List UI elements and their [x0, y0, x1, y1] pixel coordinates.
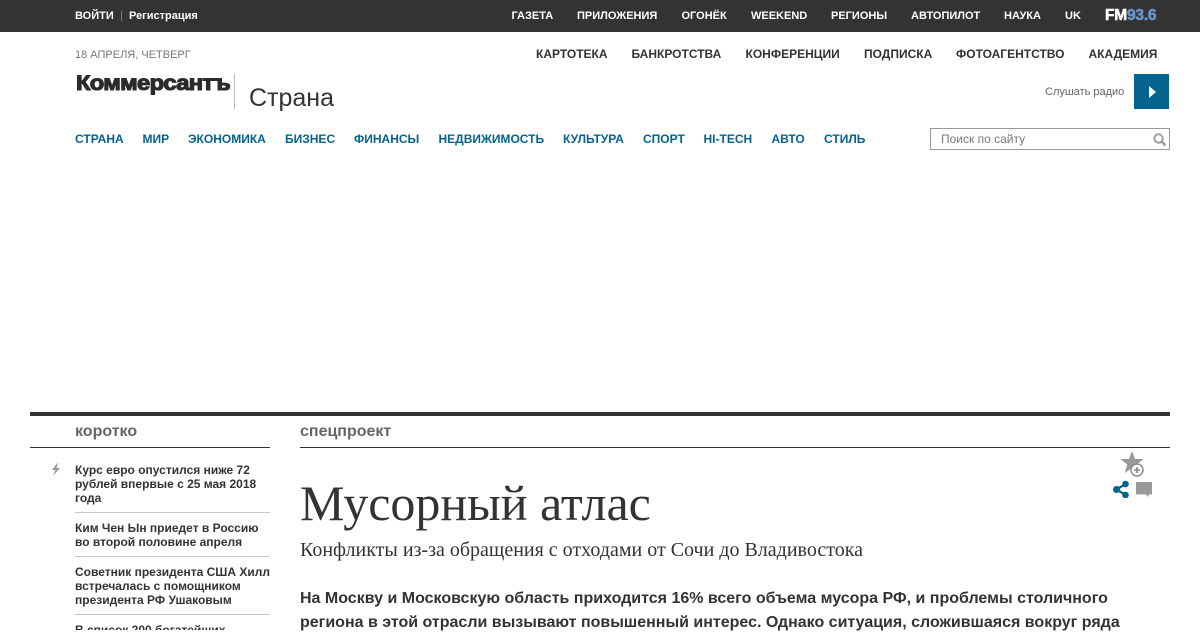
news item 1: года	[75, 491, 101, 505]
link: uk: UK	[1065, 10, 1081, 22]
logo: Kommersant: Коммерсантъ	[76, 72, 229, 94]
link: gazeta: ГАЗЕТА	[512, 10, 553, 22]
menu: business: БИЗНЕС	[285, 132, 335, 146]
article lead	[300, 590, 1120, 631]
icon: share	[1113, 480, 1129, 498]
article lead: На Москву и Московскую область приходится 16% всего объема мусора РФ, и проблемы столичного	[300, 590, 1108, 607]
section title: Страна	[249, 84, 334, 112]
main navigation	[75, 132, 865, 146]
menu: style: СТИЛЬ	[824, 132, 865, 146]
sidebar heading rule	[30, 447, 270, 448]
date: 18 АПРЕЛЯ, ЧЕТВЕРГ	[75, 49, 191, 61]
secondary navigation	[536, 47, 1157, 61]
article title: Мусорный атлас	[300, 475, 651, 531]
icon: comment	[1136, 482, 1152, 497]
search placeholder: Поиск по сайту	[941, 132, 1025, 146]
menu: auto: АВТО	[772, 132, 805, 146]
link: ogonek: ОГОНЁК	[682, 10, 727, 22]
search box	[930, 128, 1170, 150]
section rule	[300, 447, 1170, 448]
news item 3: Советник президента США Хилл	[75, 565, 270, 579]
link: photo agency: ФОТОАГЕНТСТВО	[956, 47, 1065, 61]
link: regions: РЕГИОНЫ	[831, 10, 887, 22]
link: weekend: WEEKEND	[751, 10, 807, 22]
login link: ВОЙТИ	[75, 10, 114, 22]
menu: economy: ЭКОНОМИКА	[188, 132, 266, 146]
news item 3: президента РФ Ушаковым	[75, 593, 232, 607]
news item 3: встречалась с помощником	[75, 579, 241, 593]
news item 1: Курс евро опустился ниже 72	[75, 463, 250, 477]
menu: hi-tech: HI-TECH	[704, 132, 752, 146]
section label: спецпроект	[300, 423, 391, 440]
article lead: региона в этой отрасли вызывают повышенный интерес. Однако ситуация, сложившаяся вокруг ряда	[300, 614, 1120, 631]
menu: sport: СПОРТ	[643, 132, 685, 146]
link: bankruptcy: БАНКРОТСТВА	[632, 47, 721, 61]
radio play button	[1134, 74, 1169, 109]
news item 2	[75, 521, 258, 549]
link: conferences: КОНФЕРЕНЦИИ	[746, 47, 840, 61]
thick divider	[30, 412, 1170, 416]
sidebar heading: коротко	[75, 423, 137, 440]
icon: lightning	[52, 462, 60, 476]
logo divider	[234, 74, 235, 109]
news item 3	[75, 565, 270, 607]
link: science: НАУКА	[1004, 10, 1041, 22]
menu: culture: КУЛЬТУРА	[563, 132, 624, 146]
link: academy: АКАДЕМИЯ	[1088, 47, 1157, 61]
news item 1	[75, 463, 256, 505]
menu: strana: СТРАНА	[75, 132, 124, 146]
menu: mir: МИР	[142, 132, 169, 146]
article subtitle: Конфликты из-за обращения с отходами от Сочи до Владивостока	[300, 539, 863, 561]
sidebar: short news	[30, 423, 270, 630]
icon: magnifier	[1153, 133, 1166, 146]
radio label: Слушать радио	[1045, 86, 1124, 98]
news item 2: Ким Чен Ын приедет в Россию	[75, 521, 258, 535]
news item 2: во второй половине апреля	[75, 535, 242, 549]
separator	[121, 11, 122, 21]
FM logo: FM93.6	[1105, 7, 1156, 24]
news item 1: рублей впервые с 25 мая 2018	[75, 477, 256, 491]
menu: finance: ФИНАНСЫ	[354, 132, 419, 146]
link: kartoteka: КАРТОТЕКА	[536, 47, 608, 61]
link: apps: ПРИЛОЖЕНИЯ	[577, 10, 657, 22]
link: subscription: ПОДПИСКА	[864, 47, 932, 61]
link: autopilot: АВТОПИЛОТ	[911, 10, 980, 22]
top bar	[0, 0, 1200, 32]
icon: favourite star	[1120, 451, 1144, 477]
menu: real estate: НЕДВИЖИМОСТЬ	[438, 132, 544, 146]
register link: Регистрация	[129, 10, 198, 22]
